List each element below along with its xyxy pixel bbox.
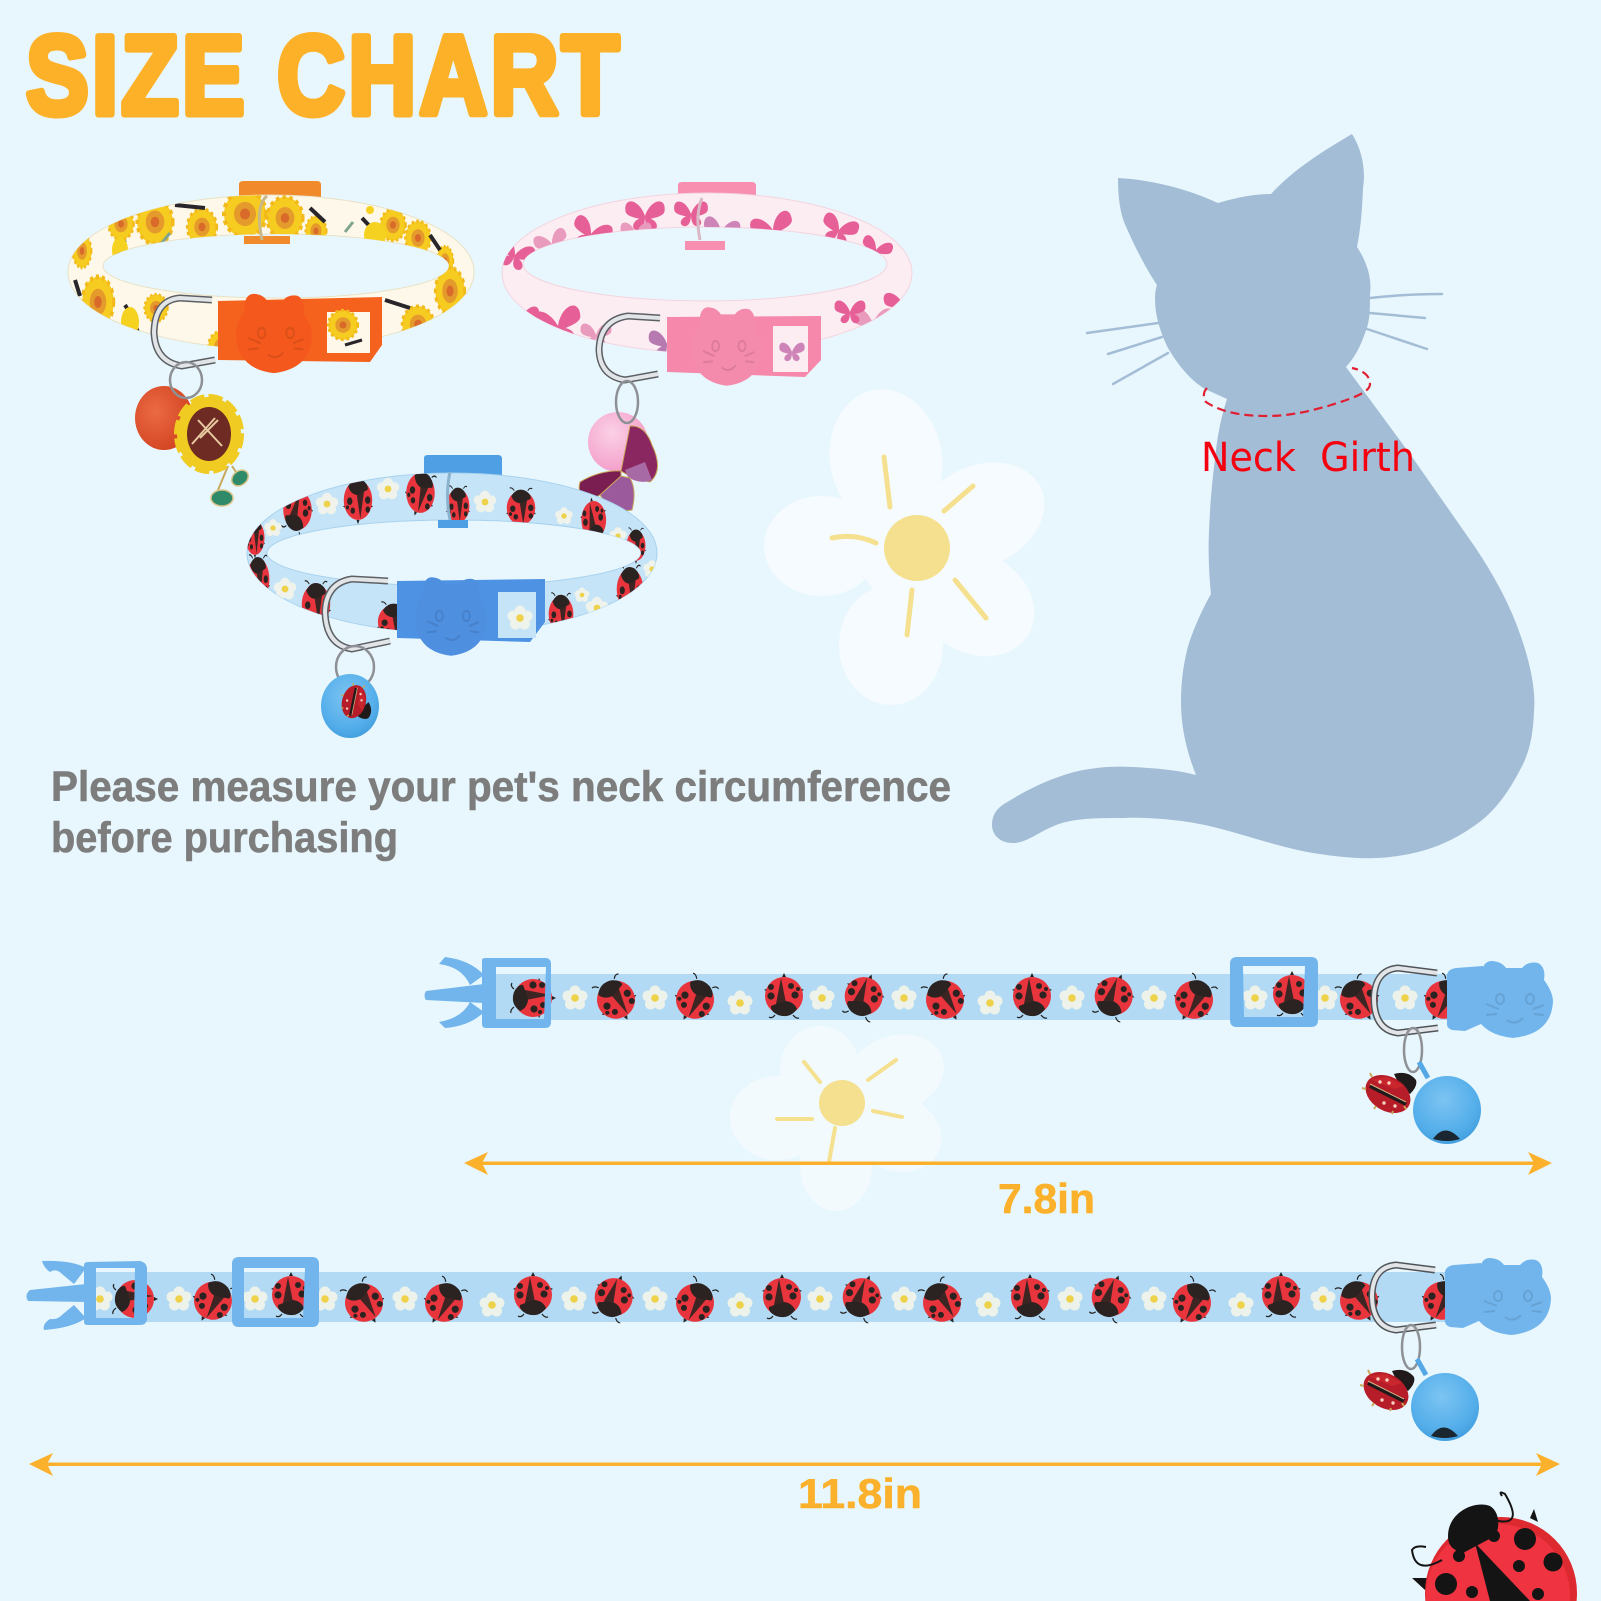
clasp frame [218, 297, 382, 362]
arrow: 7.8in span [464, 1152, 1552, 1175]
top slider crease [244, 196, 290, 244]
sunflower print [72, 195, 466, 346]
D ring [599, 316, 660, 380]
flower print [562, 986, 1418, 1014]
panel: blue ladybug collar [245, 455, 661, 738]
arrow: 11.8in span [29, 1453, 1560, 1476]
instruction text: Please measure your pet's neck circumference [51, 763, 951, 811]
strap [502, 193, 912, 353]
butterfly print [503, 201, 900, 352]
strap [247, 473, 657, 633]
top slider crease [438, 472, 468, 528]
panel: pink butterfly collar [493, 182, 923, 511]
strap [496, 974, 1476, 1020]
top slider back [424, 455, 502, 490]
panel: orange sunflower collar [68, 181, 474, 506]
label: 7.8in: 7.8in [998, 1175, 1095, 1222]
slider [1230, 957, 1318, 1027]
top slider back [678, 182, 756, 215]
cat face clasp [692, 307, 762, 386]
clasp frame [397, 579, 545, 642]
clasp window print [773, 326, 808, 372]
bell [135, 386, 193, 450]
panel: cat silhouette diagram [992, 134, 1534, 858]
slider [232, 1257, 319, 1327]
top slider back [239, 181, 321, 215]
ladybug charm [331, 677, 377, 726]
D ring [154, 298, 215, 366]
ladybug print [248, 474, 656, 630]
instruction text [51, 763, 951, 862]
clasp window print [327, 310, 370, 353]
cat face clasp [415, 577, 487, 656]
end hardware [1359, 961, 1553, 1144]
icon: large flower [764, 380, 1062, 705]
strap [68, 195, 474, 349]
butterfly charm [579, 426, 658, 511]
neck girth label: Neck Girth [1201, 435, 1415, 481]
icon: small flower [730, 1021, 955, 1211]
neck girth dashed loop [1204, 368, 1370, 416]
bell [588, 412, 648, 472]
whiskers [1087, 294, 1442, 384]
cat silhouette [992, 134, 1534, 858]
ladybug print [511, 968, 1472, 1030]
buckle [424, 957, 551, 1028]
instruction text: before purchasing [51, 814, 398, 862]
ladybug print [113, 1269, 1470, 1333]
sunflower charm [177, 397, 251, 506]
small ring [616, 381, 638, 423]
D ring [325, 579, 390, 649]
cat face clasp [236, 294, 312, 373]
buckle [26, 1261, 147, 1330]
small ring [336, 646, 374, 688]
flower print [88, 1286, 1336, 1316]
strap [95, 1272, 1475, 1322]
clasp window print [498, 592, 536, 638]
small ring [170, 362, 202, 398]
title: SIZE CHART [26, 12, 622, 138]
bell [321, 674, 379, 738]
end hardware [1357, 1258, 1551, 1441]
label: 11.8in: 11.8in [798, 1470, 922, 1517]
panel: long collar 11.8in [26, 1257, 1551, 1441]
panel: short collar 7.8in [424, 957, 1553, 1144]
top slider crease [685, 198, 725, 250]
clasp frame [667, 316, 821, 377]
icon: corner ladybug [1412, 1492, 1577, 1601]
